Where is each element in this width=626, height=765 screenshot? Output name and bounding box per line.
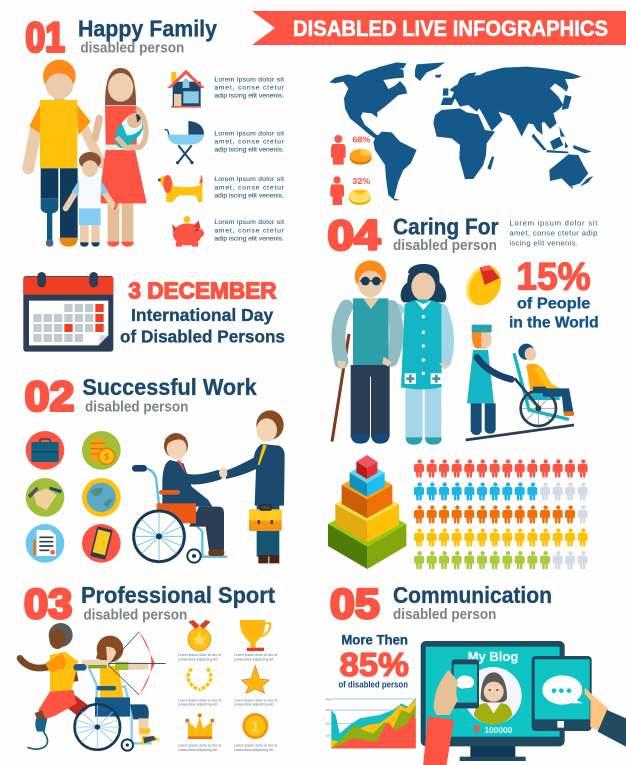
tablet held by hand xyxy=(532,656,626,747)
area chart: 200 xyxy=(326,721,331,725)
pyramid of cubes xyxy=(328,455,406,569)
stat: women 68 percent xyxy=(331,135,372,165)
text: dog caption: amet, conse ctetur xyxy=(214,184,285,191)
icon: trophy xyxy=(240,620,270,651)
text: piggy bank caption: Lorem ipsum dolor sit xyxy=(214,219,284,226)
stat: 15 percent of people in the world: of People xyxy=(517,296,590,313)
stat: 15 percent of people in the world xyxy=(509,255,599,332)
text: international day of disabled persons xyxy=(120,305,285,346)
heading 02: disabled person xyxy=(85,400,188,416)
icon: calendar xyxy=(23,272,113,352)
stat: 15 percent of people in the world: 15% xyxy=(516,255,591,298)
text: caring description: Lorem ipsum dolor sit xyxy=(509,219,598,228)
monitor with my blog: 100000 xyxy=(484,726,513,735)
area chart: 100 xyxy=(326,734,331,738)
text: piggy bank caption xyxy=(214,219,285,242)
icon: smartphone xyxy=(82,524,121,563)
text: dog caption xyxy=(214,176,285,199)
text: house caption xyxy=(214,76,285,100)
icon: dog xyxy=(157,175,203,202)
heading 05: 05 xyxy=(330,580,380,627)
monitor with my blog: My Blog xyxy=(468,649,518,664)
text: medal caption: Lorem ipsum dolor ex dex si xyxy=(178,653,222,657)
child figure xyxy=(66,152,123,247)
text: caring description: amet, conse ctetur adip xyxy=(509,229,597,238)
text: star caption xyxy=(234,698,278,707)
icon: house xyxy=(167,70,205,108)
icon: laurel wreath xyxy=(188,668,211,690)
stat: more than 85 percent xyxy=(338,631,409,689)
pictogram grid of people xyxy=(414,459,588,569)
stat: more than 85 percent: 85% xyxy=(340,647,409,684)
text: stroller caption: Lorem ipsum dolor sit xyxy=(214,130,284,137)
text: trophy caption: consectetur adipiscing elit. xyxy=(234,657,274,661)
text: house caption: Lorem ipsum dolor sit xyxy=(214,76,284,83)
icon: coins xyxy=(82,431,121,470)
archer in wheelchair xyxy=(73,632,166,751)
text: caring description: iscing elit venenis. xyxy=(509,238,578,247)
text: stroller caption: adip iscing elit venenis. xyxy=(214,147,284,154)
heading 02 xyxy=(25,373,257,420)
text: house caption: amet, conse ctetur xyxy=(214,85,285,92)
text: laurel caption xyxy=(178,698,222,707)
pie chart 15 percent xyxy=(459,259,507,311)
stat: 15 percent of people in the world: in the World xyxy=(509,315,599,332)
section 05: communication xyxy=(326,580,626,765)
icon: crown xyxy=(185,713,214,739)
nurse xyxy=(387,264,448,445)
icon: coins: $ xyxy=(104,451,109,461)
icon: star xyxy=(241,666,269,693)
world map xyxy=(329,62,593,201)
heading 01 xyxy=(25,13,217,60)
text: crown caption: Lorem ipsum dolor ex dex si xyxy=(178,744,222,748)
heading 01: 01 xyxy=(25,13,65,60)
stat: men 32 percent: 32% xyxy=(352,177,370,186)
heading 01: Happy Family xyxy=(78,16,217,42)
hand holding smartphone xyxy=(423,659,479,765)
heading 03 xyxy=(24,580,275,627)
icon: piggy bank xyxy=(172,216,204,247)
area chart: 400 xyxy=(326,697,331,701)
text: dog caption: Lorem ipsum dolor sit xyxy=(214,176,284,183)
icon: handshake xyxy=(26,478,64,517)
text: caring description xyxy=(509,219,598,247)
text: piggy bank caption: adip iscing elit venenis. xyxy=(214,235,284,242)
stat: men 32 percent xyxy=(330,176,371,205)
blind man with cane xyxy=(332,260,397,444)
text: coin caption xyxy=(234,744,278,752)
nurse pushing wheelchair up a ramp xyxy=(466,325,574,440)
text: international day of disabled persons: of Disabled Persons xyxy=(120,326,285,346)
text: dog caption: adip iscing elit venenis. xyxy=(214,192,284,199)
title banner xyxy=(252,11,626,45)
heading 02: 02 xyxy=(25,373,74,420)
icon: globe xyxy=(82,478,121,517)
heading 03: disabled person xyxy=(83,608,187,624)
standing man with briefcase xyxy=(221,410,285,563)
text: stroller caption xyxy=(214,130,285,154)
heading 04: disabled person xyxy=(393,238,497,254)
text: medal caption: consectetur adipiscing elit. xyxy=(178,657,218,661)
text: international day of disabled persons: International Day xyxy=(131,305,273,325)
heading 01: disabled person xyxy=(80,41,184,57)
calendar and 3 December xyxy=(23,272,285,352)
text: piggy bank caption: amet, conse ctetur xyxy=(214,227,285,234)
section 01: happy family xyxy=(25,13,285,247)
text: crown caption xyxy=(178,744,222,752)
heading 05: disabled person xyxy=(393,607,496,623)
section 03: professional sport xyxy=(20,580,278,752)
stat: more than 85 percent: More Then xyxy=(341,631,408,647)
icon: medal xyxy=(188,620,211,651)
runner with prosthetic leg xyxy=(20,623,90,749)
text: laurel caption: Lorem ipsum dolor ex dex si xyxy=(178,698,222,702)
area chart: 300 xyxy=(326,708,331,712)
text: trophy caption: Lorem ipsum dolor ex dex si xyxy=(234,653,278,657)
text: 3 December: 3 DECEMBER xyxy=(128,277,277,303)
heading 02: Successful Work xyxy=(82,374,257,400)
monitor with my blog xyxy=(421,641,565,761)
father figure xyxy=(28,60,101,247)
heading 04 xyxy=(328,212,499,259)
text: trophy caption xyxy=(234,653,278,661)
icon: gold coin xyxy=(242,713,268,739)
mother figure with baby xyxy=(95,68,147,247)
heading 04: 04 xyxy=(328,212,381,259)
text: medal caption xyxy=(178,653,222,661)
text: house caption: adip iscing elit venenis. xyxy=(214,93,284,100)
heading 05 xyxy=(330,580,552,627)
section 02: successful work xyxy=(25,373,285,563)
text: crown caption: consectetur adipiscing elit. xyxy=(178,748,218,752)
icon: stroller xyxy=(165,121,204,164)
text: star caption: Lorem ipsum dolor ex dex si xyxy=(234,698,278,702)
heading 04: Caring For xyxy=(393,213,499,239)
section 04: caring for xyxy=(328,212,599,445)
seated man in wheelchair xyxy=(132,433,227,563)
area chart xyxy=(326,697,416,748)
text: laurel caption: consectetur adipiscing elit. xyxy=(178,703,218,707)
text: stroller caption: amet, conse ctetur xyxy=(214,139,285,146)
heading 05: Communication xyxy=(393,582,552,608)
stat: women 68 percent: 68% xyxy=(352,136,371,145)
heading 03: Professional Sport xyxy=(81,582,275,608)
icon: briefcase xyxy=(26,431,64,470)
text: coin caption: consectetur adipiscing elit. xyxy=(234,748,274,752)
icon: document xyxy=(26,524,64,563)
stat: more than 85 percent: of disabled person xyxy=(338,679,408,689)
icon: gold coin: 1 xyxy=(251,719,259,735)
text: star caption: consectetur adipiscing elit. xyxy=(234,703,274,707)
heading 03: 03 xyxy=(24,580,72,627)
text: coin caption: Lorem ipsum dolor ex dex si xyxy=(234,744,278,748)
